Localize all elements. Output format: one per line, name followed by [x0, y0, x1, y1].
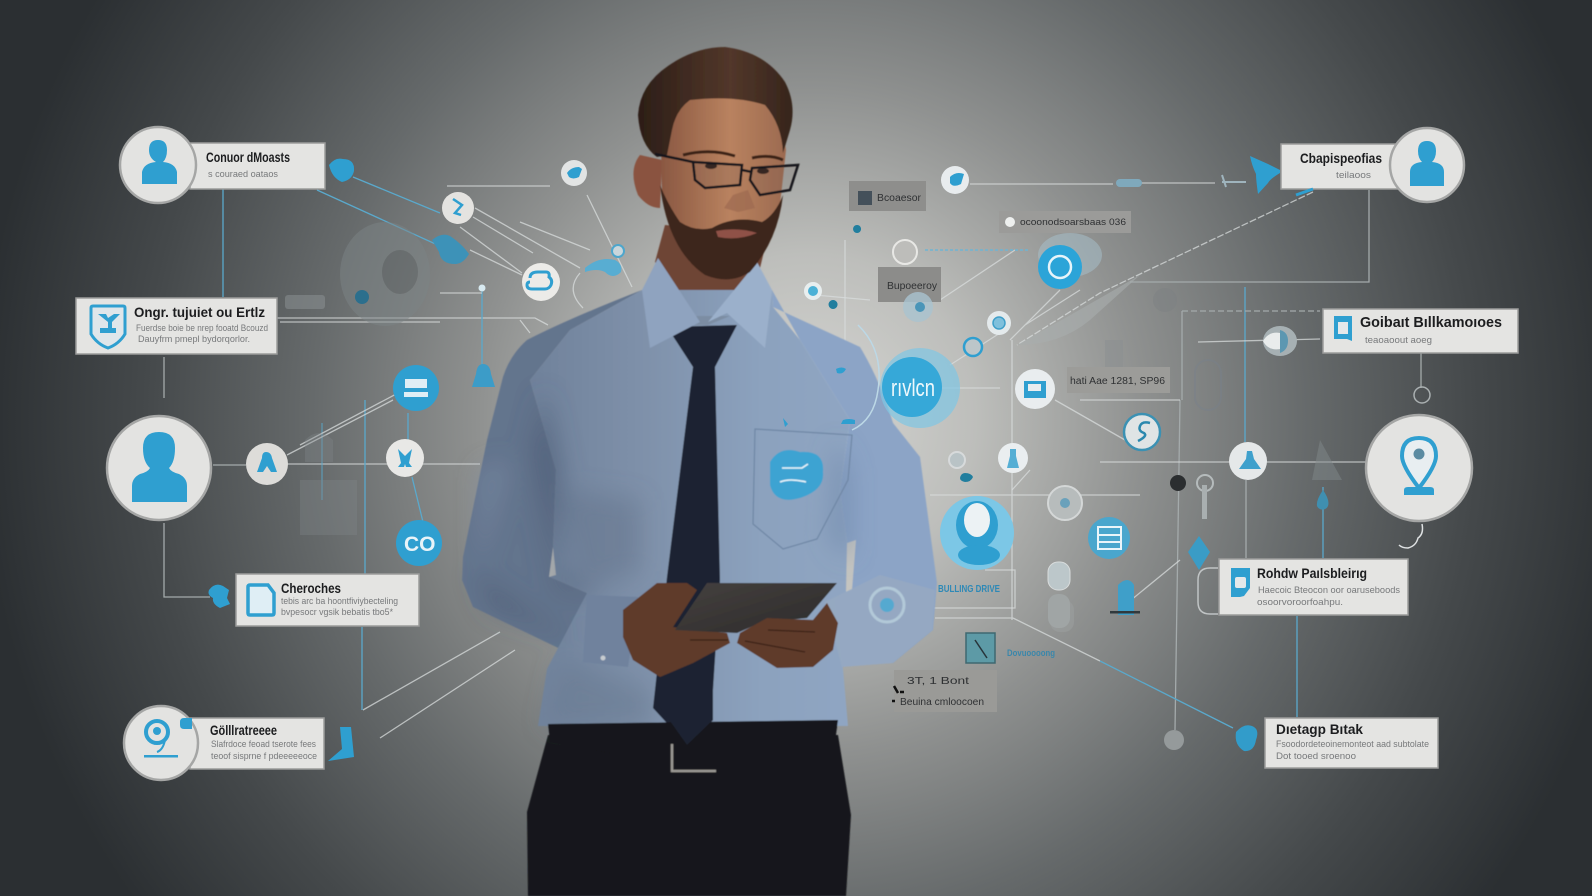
caption line 2: Dot tooed sroenoo — [1276, 751, 1356, 762]
avatar node — [940, 496, 1014, 570]
ring node center — [993, 317, 1005, 329]
left cuff — [583, 595, 638, 667]
top-right node: label + circle — [1281, 128, 1464, 202]
man figure — [462, 47, 937, 896]
icon: badge — [1231, 568, 1250, 597]
dark dot — [1170, 475, 1186, 491]
ribbon — [585, 259, 621, 276]
hair — [638, 47, 793, 157]
blue c — [964, 338, 982, 356]
eyes — [705, 163, 769, 174]
tablet — [675, 583, 837, 633]
blue diamond — [1188, 536, 1210, 570]
capsule connector — [1116, 179, 1142, 187]
belt — [548, 720, 838, 765]
avatar body — [958, 545, 1000, 565]
left small nodes — [208, 159, 624, 761]
right panel: contact card — [1323, 309, 1518, 353]
left hand — [623, 583, 730, 677]
doc glyph — [1098, 527, 1121, 549]
loop under big circle — [1399, 524, 1422, 548]
avatar disc — [1390, 128, 1464, 202]
text tag text: hati Aae 1281, SP96 — [1070, 376, 1165, 387]
bottle glyph — [1007, 449, 1019, 468]
title: Conuor dMoasts — [206, 149, 290, 165]
caption line 1: Fuerdse boie be nrep fooatd Bcouzd — [136, 323, 268, 334]
blue caption: Dovuoooong — [1007, 648, 1055, 658]
head — [633, 47, 798, 279]
label card — [190, 143, 325, 189]
teal dots — [829, 225, 973, 482]
teal square — [966, 633, 995, 663]
caption: teaoaoout aoeg — [1365, 335, 1432, 346]
left panel: organisation card — [76, 298, 277, 354]
right panel: profile card — [1198, 559, 1408, 615]
avatar disc — [120, 127, 196, 203]
shirt pocket — [753, 429, 852, 549]
finger lines — [690, 630, 815, 652]
ring node — [987, 311, 1011, 335]
blue dots — [783, 368, 855, 427]
bottle node — [998, 443, 1028, 473]
small ring — [612, 245, 624, 257]
eyebrows — [683, 152, 783, 160]
collar inner — [680, 316, 730, 325]
grey end dot — [1164, 730, 1184, 750]
top-left node: circle + label — [120, 127, 325, 203]
shoulder ring — [852, 325, 879, 430]
top tag icon — [858, 191, 872, 205]
big circle — [882, 357, 942, 417]
ear — [633, 155, 662, 208]
icon: tablet screen — [1338, 322, 1348, 334]
arm gaps — [549, 547, 556, 577]
caption: teilaoos — [1336, 170, 1371, 181]
wide tag text: ocoonodsoarsbaas 036 — [1020, 217, 1126, 227]
right small nodes — [783, 156, 1430, 751]
pocket badge — [770, 450, 823, 500]
small ring — [1414, 387, 1430, 403]
lock glyph — [915, 302, 925, 312]
wide tag dot — [1005, 217, 1015, 227]
text tag — [1067, 367, 1170, 393]
blob top — [329, 159, 354, 182]
hemi node — [1263, 326, 1297, 356]
bird node — [386, 439, 424, 477]
top node — [941, 166, 969, 194]
glasses — [655, 154, 798, 195]
A glyph — [257, 452, 277, 472]
white avatar node — [1229, 442, 1267, 480]
beard — [660, 185, 783, 279]
arrow glyph — [453, 199, 462, 215]
title: Cheroches — [281, 580, 341, 596]
avatar face — [964, 503, 990, 537]
blue blob bottom — [1236, 725, 1257, 751]
left panel: checkers card — [236, 574, 419, 626]
shirt shading — [473, 390, 850, 726]
CO glyph: CO — [404, 533, 436, 556]
caption line 2: osoorvoroorfoahpu. — [1257, 597, 1343, 608]
icon: person — [132, 432, 187, 502]
wide tag — [999, 211, 1131, 233]
caption line 1: Slafrdoce feoad tserote fees — [211, 739, 316, 750]
title: Rohdw Paılsbleirıg — [1257, 565, 1367, 581]
icon: person — [1410, 141, 1444, 186]
hemi highlight — [1263, 333, 1280, 349]
avatar head — [956, 501, 998, 549]
white arrow node — [442, 192, 474, 224]
left sleeve — [462, 290, 642, 667]
icon: shield glyph — [98, 314, 120, 333]
halo big — [880, 348, 960, 428]
socket stem — [1202, 485, 1207, 519]
dash head — [1296, 189, 1313, 195]
bell — [472, 364, 495, 387]
ring socket — [1197, 475, 1213, 491]
right sleeve — [772, 290, 937, 667]
title: Ongr. tujuiet ou Ertlz — [134, 304, 265, 320]
icon: document — [248, 585, 274, 615]
chat glyph — [527, 272, 552, 289]
business tag text: Bupoeeroy — [887, 281, 937, 292]
caption line 1: Haecoic Bteocon oor oaruseboods — [1258, 585, 1400, 596]
caption line 2: teoof sisprne f pdeeeeeoce — [211, 751, 317, 762]
trousers — [527, 735, 851, 896]
top node glyph — [950, 173, 964, 186]
title: Dıetagp Bıtak — [1276, 721, 1363, 737]
ghost shapes in the background — [285, 222, 1342, 632]
lamp base — [1110, 611, 1140, 614]
bird marker — [1222, 175, 1246, 187]
floppy node — [1015, 369, 1055, 409]
mouth — [716, 229, 757, 238]
curved bracket — [1198, 568, 1218, 614]
small node — [804, 282, 822, 300]
blue ring glyph — [1049, 256, 1071, 278]
face — [661, 90, 786, 277]
big circle text: rıvlcn — [891, 375, 935, 402]
caption line 2: Dauyfrm pmepl bydorqorlor. — [138, 334, 250, 345]
twitter glyph — [567, 167, 582, 178]
grey bulb — [1048, 486, 1082, 520]
lock bubble — [903, 292, 933, 322]
nose shadow — [724, 190, 755, 212]
icon: webcam — [144, 718, 192, 758]
keyboard glyph — [404, 379, 428, 397]
icon: tablet — [1334, 316, 1352, 341]
blue lamp — [1118, 580, 1134, 615]
blue keyboard node — [393, 365, 439, 411]
bottom-left node: circle + label — [124, 706, 324, 780]
torso — [530, 290, 850, 726]
neck — [655, 225, 768, 322]
black marks — [892, 686, 904, 701]
left collar — [642, 258, 700, 348]
white ring — [893, 240, 917, 264]
grey ring — [949, 452, 965, 468]
large right circle with location pin — [1366, 415, 1472, 521]
CO node — [396, 520, 442, 566]
title: Goibaıt Bıllkamoıoes — [1360, 314, 1502, 331]
right collar — [708, 262, 772, 348]
S glyph — [1138, 422, 1150, 441]
icon: location pin — [1402, 438, 1436, 495]
bird glyph — [398, 449, 412, 467]
icon: person — [142, 140, 177, 184]
small dot — [478, 284, 486, 292]
sleeve hologram icon — [870, 588, 904, 622]
hemi blue — [1280, 330, 1288, 353]
caption tag line 2: Beuina cmloocoen — [900, 697, 984, 708]
caption tag — [894, 670, 997, 712]
caption line 2: bvpesocr vgsik bebatis tbo5* — [281, 607, 393, 618]
right hand — [737, 603, 838, 668]
cuff button — [600, 656, 606, 660]
halo cloud — [1038, 233, 1102, 277]
dark dot — [355, 290, 369, 304]
caption line 1: Fsoodordeteoinemonteot aad subtolate — [1276, 739, 1429, 750]
caption tag line 1: 3T, 1 Bont — [907, 676, 969, 687]
top tag text: Bcoaesor — [877, 193, 922, 204]
title: Cbapispeofias — [1300, 150, 1382, 166]
caption line 1: tebis arc ba hoontfiviybecteling — [281, 596, 398, 607]
caption: s couraed oataos — [208, 169, 278, 180]
fish icon — [1250, 156, 1280, 194]
small node center — [808, 286, 818, 296]
twitter node — [561, 160, 587, 186]
floppy glyph — [1024, 381, 1046, 398]
drop — [1317, 490, 1328, 510]
blue ring node — [1038, 245, 1082, 289]
chat node — [522, 263, 560, 301]
small blue blobs — [208, 585, 230, 608]
tie tip — [655, 700, 713, 745]
blue figure bottom left — [328, 727, 354, 761]
capsule — [1048, 562, 1070, 590]
capsule lower — [1048, 594, 1070, 628]
title: Gölllratreeee — [210, 722, 277, 738]
right panel: bottom card — [1265, 718, 1438, 768]
S node — [1124, 414, 1160, 450]
teal square stroke — [975, 640, 987, 658]
large left avatar — [107, 416, 211, 520]
top tag — [849, 181, 926, 211]
right cuff — [825, 575, 935, 667]
icon: badge inset — [1235, 577, 1246, 588]
blue text: BULLING DRIVE — [938, 584, 1000, 595]
connector network — [164, 177, 1421, 738]
tie — [653, 325, 737, 745]
icon: shield — [91, 306, 125, 348]
belt buckle — [672, 744, 716, 771]
blue doc node — [1088, 517, 1130, 559]
business tag — [878, 267, 941, 302]
avatar A node — [246, 443, 288, 485]
grey bulb center — [1060, 498, 1070, 508]
blob middle — [432, 235, 469, 264]
avatar glyph — [1239, 451, 1261, 469]
avatar disc — [124, 706, 198, 780]
